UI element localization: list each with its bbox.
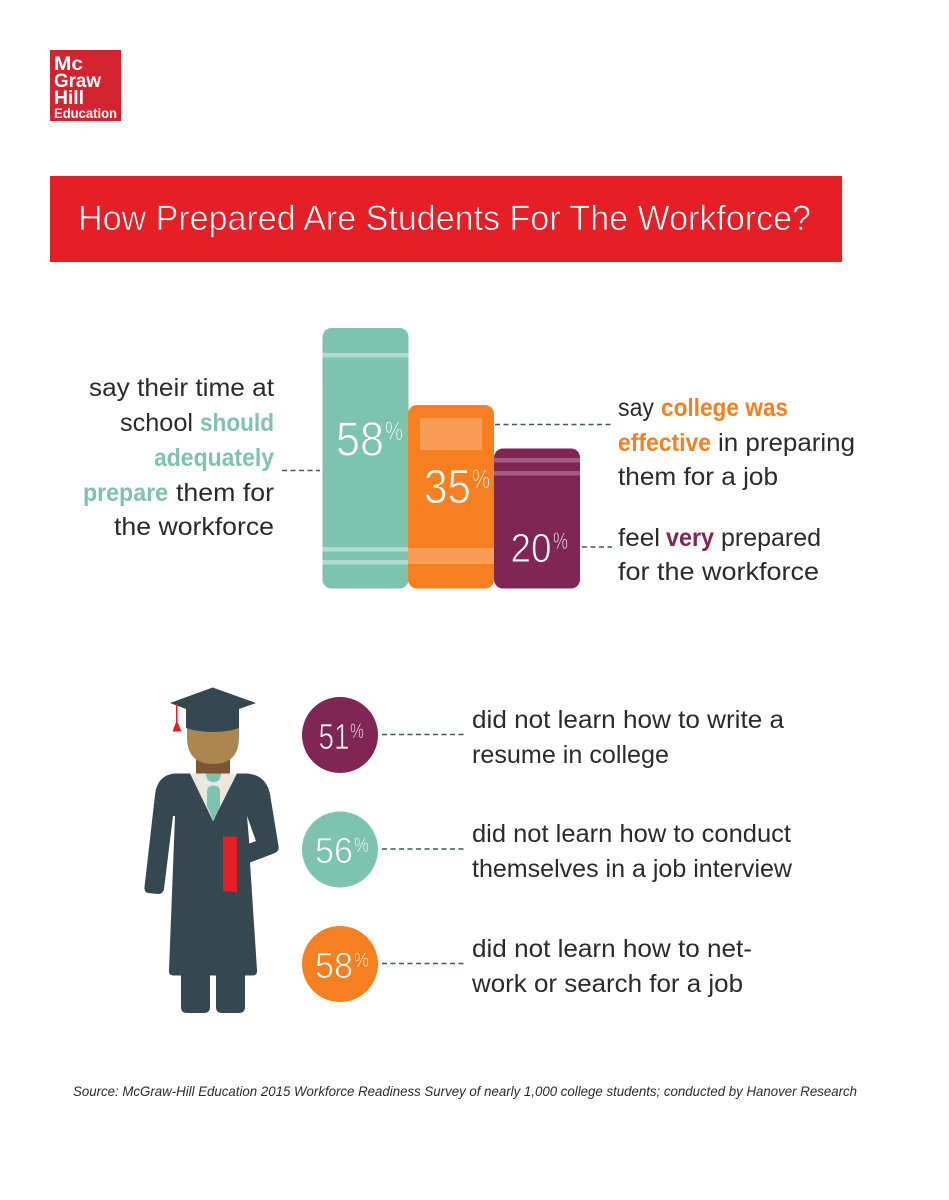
arm gap bbox=[247, 816, 256, 844]
stat: 51%: resume in college bbox=[472, 741, 669, 769]
text block: left label 58% bbox=[83, 374, 274, 541]
text block: left label 58%: should bbox=[200, 409, 274, 437]
logo: McGraw Hill Education: Mc bbox=[54, 54, 83, 75]
bar: 58% teal book: % bbox=[385, 416, 403, 446]
text block: right label 20%: for the workforce bbox=[618, 558, 819, 586]
connector: purple bar to label bbox=[582, 546, 612, 548]
bar: 35% orange book bbox=[408, 405, 494, 588]
connector: left label to teal bar bbox=[282, 470, 320, 472]
text block: left label 58%: adequately bbox=[154, 444, 274, 472]
logo: McGraw Hill Education: Hill bbox=[54, 88, 84, 109]
logo: McGraw Hill Education bbox=[50, 50, 121, 121]
text block: right label 20% bbox=[618, 524, 821, 586]
bar: 20% purple book: 20 bbox=[510, 525, 552, 571]
stat: 51%: 51 bbox=[318, 716, 350, 757]
logo: McGraw Hill Education: Graw bbox=[54, 71, 101, 92]
text block: right label 35%: say bbox=[618, 394, 654, 422]
text block: left label 58%: them for bbox=[176, 479, 274, 507]
stat: 58%: work or search for a job bbox=[471, 970, 743, 998]
text block: right label 35%: college was bbox=[661, 394, 788, 422]
text block: right label 35%: in preparing bbox=[718, 429, 855, 457]
bar chart: books bbox=[322, 328, 580, 588]
stat: 58%: 58 bbox=[315, 945, 353, 986]
logo: McGraw Hill Education: Education bbox=[54, 106, 117, 121]
text block: right label 20%: very bbox=[666, 524, 714, 552]
text block: left label 58%: school bbox=[120, 409, 193, 437]
text block: left label 58%: prepare bbox=[83, 479, 168, 507]
text block: left label 58%: the workforce bbox=[114, 513, 274, 541]
icon: graduate figure bbox=[144, 688, 279, 1013]
bar: 58% teal book: 58 bbox=[336, 414, 384, 466]
cap bbox=[170, 688, 256, 732]
text block: right label 35%: effective bbox=[618, 429, 711, 457]
collar bbox=[190, 774, 237, 821]
neck bbox=[196, 755, 230, 774]
bar: 58% teal book bbox=[322, 328, 408, 588]
source note: Source: McGraw-Hill Education 2015 Workforce Readiness Survey of nearly 1,000 college students; conducted by Hanover Research bbox=[73, 1083, 857, 1099]
tassel bbox=[172, 704, 182, 732]
stat: 56%: did not learn how to conduct bbox=[472, 820, 791, 848]
stat: 51%: did not learn how to write a bbox=[472, 706, 784, 734]
stat: 56%: themselves in a job interview bbox=[472, 855, 793, 883]
stat: 58% bbox=[302, 926, 752, 1002]
connector: orange bar to label bbox=[495, 424, 612, 426]
stat: 56%: 56 bbox=[315, 830, 353, 871]
title banner: How Prepared Are Students For The Workforce? bbox=[78, 199, 811, 238]
stat: 56%: % bbox=[354, 834, 369, 857]
text block: right label 20%: feel bbox=[618, 524, 660, 552]
text block: right label 20%: prepared bbox=[721, 524, 821, 552]
tie bbox=[206, 774, 221, 782]
title banner bbox=[50, 176, 842, 262]
text block: left label 58%: say their time at bbox=[89, 374, 274, 402]
stat: 51%: % bbox=[350, 720, 364, 743]
stat: 58%: % bbox=[354, 949, 369, 972]
bar: 35% orange book: 35 bbox=[424, 461, 471, 514]
text block: right label 35%: them for a job bbox=[618, 463, 778, 491]
legs bbox=[181, 974, 245, 1013]
bar: 20% purple book bbox=[494, 448, 580, 588]
face bbox=[187, 725, 239, 764]
bar: 35% orange book: % bbox=[472, 464, 490, 494]
book bbox=[223, 836, 237, 892]
gown bbox=[144, 774, 279, 976]
stat: 51% bbox=[302, 697, 784, 773]
stat: 58%: did not learn how to net- bbox=[472, 935, 752, 963]
bar: 20% purple book: % bbox=[553, 528, 568, 555]
stat: 56% bbox=[302, 812, 793, 888]
text block: right label 35% bbox=[618, 394, 855, 491]
